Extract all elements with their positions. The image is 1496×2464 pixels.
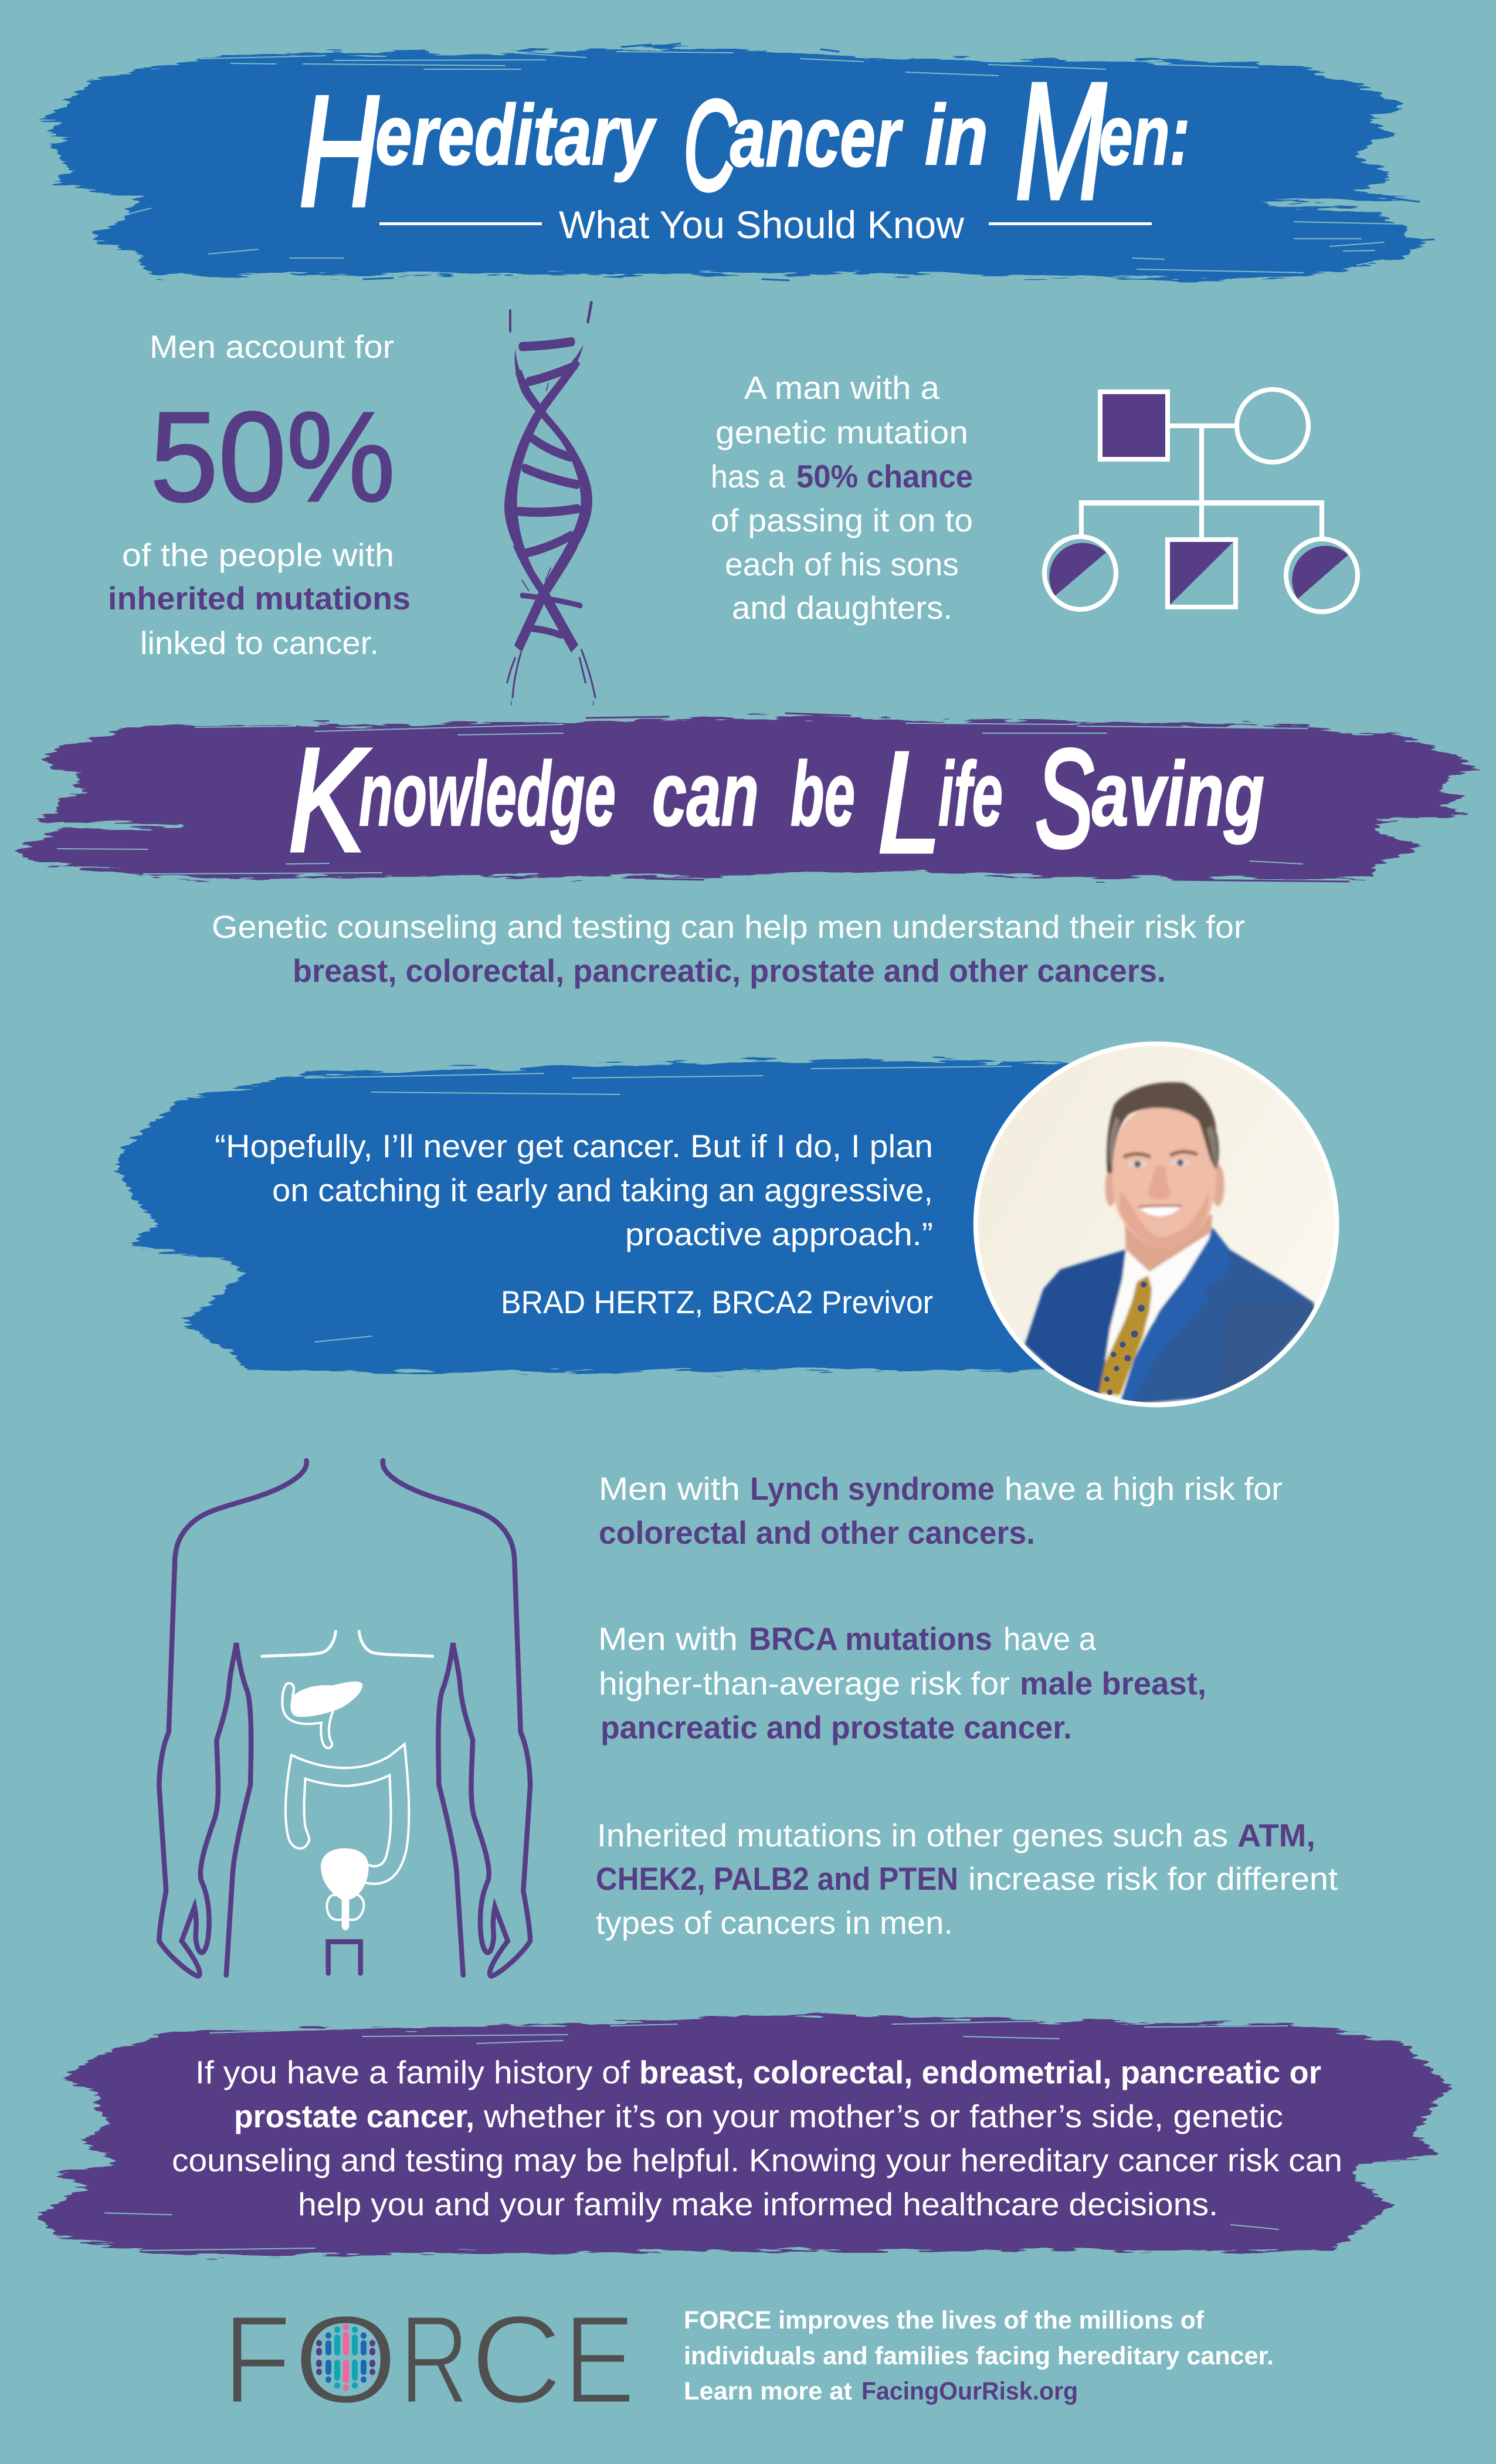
text block: men account for 50%: Men account for [150,328,394,365]
text block: Lynch syndrome: Men with [599,1470,740,1507]
heading: knowledge can be life saving: nowledge [359,743,616,845]
text block: men account for 50%: inherited mutations [108,580,411,616]
photo: portrait of Brad Hertz [973,1042,1339,1408]
quote text: “Hopefully, I’ll never get cancer. But if I do, I plan [215,1128,933,1164]
text block: 50% chance of passing on: each of his sons [725,546,959,582]
footer text: about FORCE: individuals and families facing hereditary cancer. [684,2342,1274,2370]
text block: BRCA mutations: Men with [598,1621,738,1657]
logo: FORCE: E [564,2289,635,2430]
text block: 50% chance of passing on: and daughters. [732,589,952,626]
face [1112,1105,1216,1248]
main title: ancer [730,89,904,184]
text block: BRCA mutations: higher-than-average risk for [599,1665,1010,1702]
text block: men account for 50%: linked to cancer. [140,625,379,661]
text block: 50% chance of passing on: has a [711,458,785,494]
text block: 50% chance of passing on: of passing it on to [711,502,973,538]
main title: in [925,87,988,182]
logo: FORCE: O [293,2289,398,2430]
illustration: male torso with organs [159,1460,530,1976]
panel: family history brush [38,2014,1450,2256]
logo: FORCE: F [223,2289,291,2430]
text block: BRCA mutations: male breast, [1020,1665,1206,1702]
text block: other genes [596,1817,1338,1941]
footer text: about FORCE [684,2306,1274,2405]
main title: H [299,63,379,239]
tie [1099,1276,1152,1395]
father: filled square [1100,392,1168,459]
panel: title brush banner [40,43,1434,280]
heading: knowledge can be life saving: can [652,743,759,845]
child: half-filled square [1168,540,1236,607]
heading: knowledge can be life saving: S [1035,721,1094,876]
text block: other genes: Inherited mutations in other genes such as [597,1817,1228,1853]
text block: BRCA mutations: pancreatic and prostate cancer. [601,1709,1072,1746]
footer text: about FORCE: Learn more at [684,2377,852,2405]
logo: coloured DNA mark inside O [316,2324,375,2391]
child: half-filled circle left [1044,537,1116,609]
logo: FORCE: R [399,2289,469,2430]
heading: knowledge can be life saving: K [289,718,369,882]
text block: genetic counseling intro [212,909,1245,989]
text block: men account for 50% [108,328,411,661]
family history text: help you and your family make informed healthcare decisions. [298,2186,1218,2222]
text block: BRCA mutations: have a [1003,1621,1096,1657]
main title: M [1015,48,1107,233]
hair [1107,1082,1219,1173]
text block: Lynch syndrome: have a high risk for [1005,1470,1283,1507]
text block: other genes: types of cancers in men. [596,1904,953,1941]
main title: ereditary [375,87,657,182]
quote text: proactive approach.” [625,1216,933,1252]
text block: genetic counseling intro: breast, colorectal, pancreatic, prostate and other cancers. [293,953,1166,989]
text block: Lynch syndrome: colorectal and other cancers. [599,1514,1035,1551]
text block: 50% chance of passing on: genetic mutation [715,414,968,450]
eyes and brows [1124,1154,1151,1157]
text block: men account for 50%: of the people with [122,537,394,573]
footer text: about FORCE: FacingOurRisk.org [861,2377,1078,2405]
heading: knowledge can be life saving: ife [938,743,1003,845]
family history text: If you have a family history of [195,2054,630,2090]
mother: empty circle [1237,389,1308,462]
logo: FORCE [223,2289,635,2430]
body outline [159,1460,530,1976]
family history text [172,2054,1342,2222]
quote text: on catching it early and taking an aggressive, [272,1172,933,1208]
text block: other genes: CHEK2, PALB2 and PTEN [596,1860,958,1897]
heading: knowledge can be life saving: be [791,743,855,845]
footer text: about FORCE: FORCE improves the lives of the millions of [684,2306,1205,2334]
suit [1025,1249,1126,1398]
organs: ribs, pancreas, colon, prostate [262,1632,433,1930]
text block: Lynch syndrome [599,1470,1283,1551]
shirt [1103,1232,1211,1363]
quote attribution: BRAD HERTZ, BRCA2 Previvor [501,1284,933,1320]
ears [1105,1170,1116,1206]
icon: DNA helix [504,303,595,705]
logo: FORCE: C [470,2289,562,2430]
icon: family pedigree chart [1044,389,1358,612]
text block: 50% chance of passing on: 50% chance [796,458,973,494]
text block: BRCA mutations [598,1621,1206,1746]
text block: Lynch syndrome: Lynch syndrome [750,1470,995,1507]
family history text: whether it’s on your mother’s or father’s side, genetic [483,2098,1283,2134]
neck [1125,1215,1212,1273]
heading: knowledge can be life saving: aving [1092,743,1264,845]
family history text: prostate cancer, [234,2098,474,2134]
mouth [1139,1207,1181,1216]
text block: 50% chance of passing on [711,370,973,626]
main title: C [683,74,737,217]
heading: knowledge can be life saving: L [878,722,941,882]
subtitle with rules: What You Should Know [559,203,964,246]
text block: genetic counseling intro: Genetic counseling and testing can help men understand their risk for [212,909,1245,945]
text block: BRCA mutations: BRCA mutations [749,1621,992,1657]
family history text: breast, colorectal, endometrial, pancreatic or [639,2054,1321,2090]
panel: knowledge brush banner [14,713,1484,882]
big number 50%: 50% [150,386,395,528]
family history text: counseling and testing may be helpful. Knowing your hereditary cancer risk can [172,2142,1342,2178]
text block: 50% chance of passing on: A man with a [744,370,939,406]
text block: other genes: ATM, [1237,1817,1315,1853]
child: half-filled circle right [1286,539,1358,612]
text block: other genes: increase risk for different [968,1860,1338,1897]
quote text [215,1128,933,1252]
subtitle with rules [379,203,1152,246]
panel: quote brush [114,1059,1097,1372]
main title: en: [1099,87,1190,182]
